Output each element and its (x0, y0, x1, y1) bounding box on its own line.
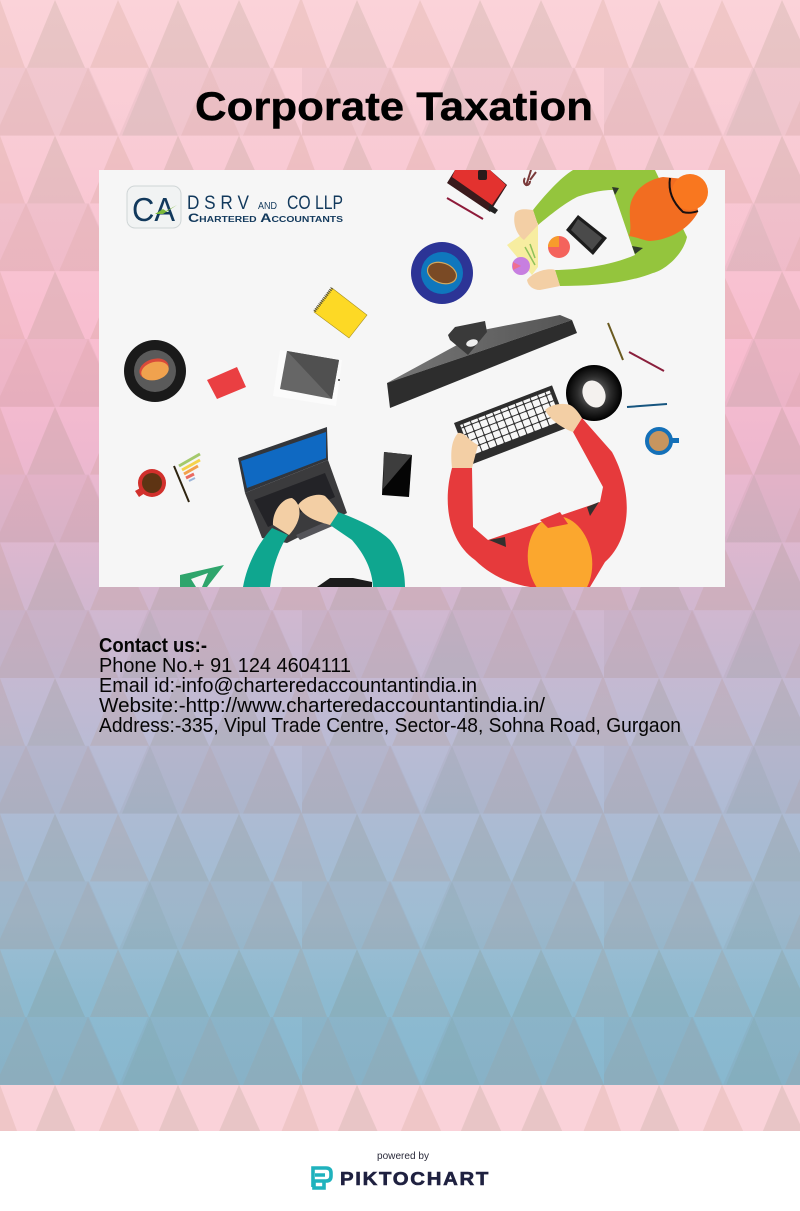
icon: red notebook and pencil (447, 170, 507, 219)
person: woman in green (507, 170, 708, 290)
title: Corporate Taxation (195, 85, 593, 129)
company logo: Chartered Accountants (188, 211, 344, 225)
icon: blue plate with food (411, 242, 473, 304)
contact details: Contact us:- (99, 635, 207, 657)
icon: glasses (524, 170, 536, 186)
contact details: Address:-335, Vipul Trade Centre, Sector-48, Sohna Road, Gurgaon (99, 715, 681, 737)
icon: left plate (124, 340, 186, 402)
contact details (99, 635, 681, 737)
footer white strip (0, 1131, 800, 1211)
icon: mouse on pad (566, 365, 622, 421)
icon: tablet black (382, 452, 412, 497)
footer: powered by text: powered by (377, 1151, 429, 1162)
icon: pencil and chart (174, 454, 200, 502)
icon: yellow notepad (314, 288, 367, 338)
icon: blue coffee cup (647, 429, 679, 453)
company logo: D S R V (187, 193, 249, 214)
icon: computer monitor (387, 315, 577, 408)
contact details: Phone No.+ 91 124 4604111 (99, 655, 351, 677)
panel: office illustration (99, 170, 725, 608)
footer: piktochart wordmark: PIKTOCHART (340, 1169, 490, 1189)
company logo: CO LLP (287, 193, 343, 214)
person: man in red at keyboard (448, 385, 627, 608)
icon: green set square (180, 565, 224, 587)
company logo (127, 186, 344, 228)
icon: piktochart logo (313, 1168, 331, 1188)
icon: gray tablet (280, 351, 340, 399)
bottom pink pattern band (0, 1085, 800, 1131)
company logo: AND (258, 201, 277, 212)
icon: coffee cup red (135, 469, 166, 497)
contact details: Email id:-info@charteredaccountantindia.in (99, 675, 477, 697)
contact details: Website:-http://www.charteredaccountantindia.in/ (99, 695, 545, 717)
icon: pencils (608, 323, 667, 407)
company logo: CA (132, 191, 175, 228)
icon: red notebook small (207, 367, 246, 399)
person: man with laptop (238, 427, 405, 587)
